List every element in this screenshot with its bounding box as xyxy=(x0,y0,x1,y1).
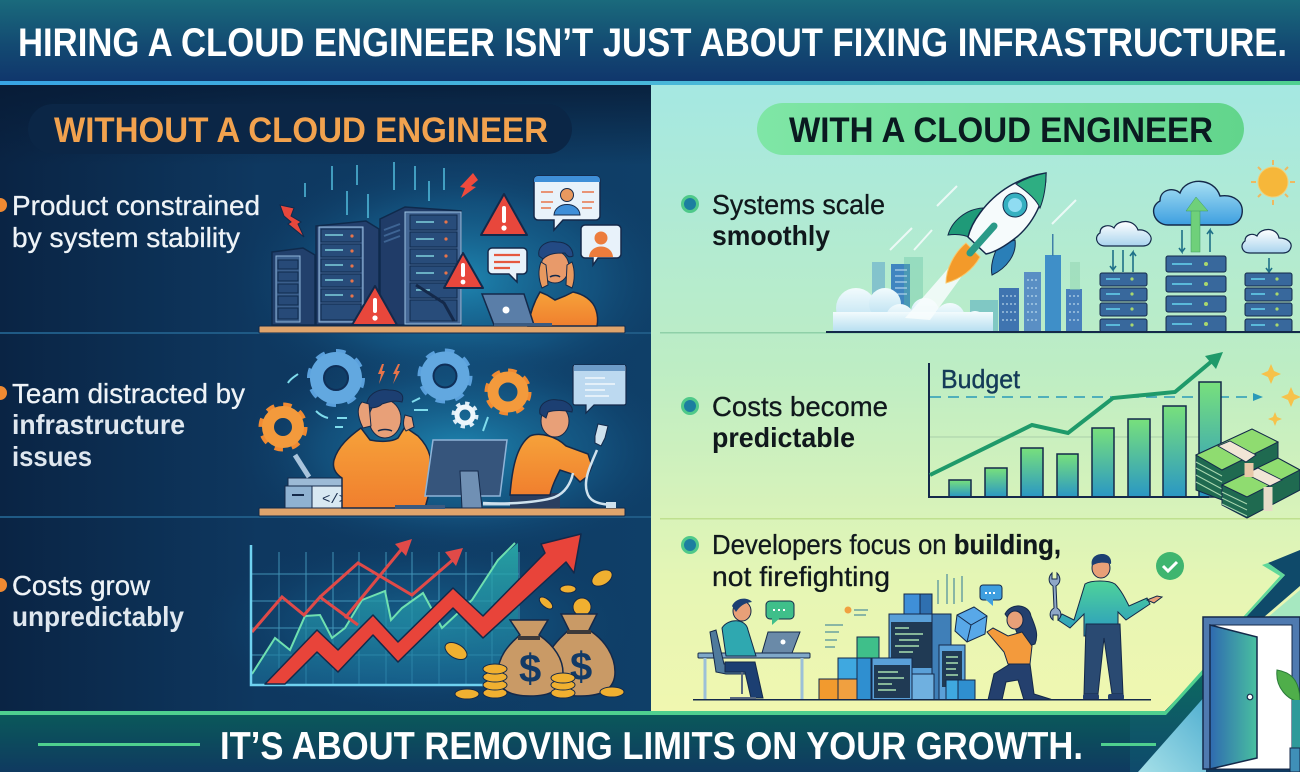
carried cube xyxy=(955,607,987,642)
trend line xyxy=(930,361,1212,475)
stressed developer xyxy=(333,390,430,508)
footer right rule xyxy=(1101,743,1156,746)
point: systems scale: smoothly xyxy=(712,220,831,251)
small transfer arrows xyxy=(1110,230,1272,272)
point: systems scale: Systems scale xyxy=(712,189,885,220)
icon: wrench xyxy=(1049,573,1061,620)
point: product constrained: by system stability xyxy=(12,222,240,253)
coins scattered xyxy=(442,566,615,663)
icon: sun xyxy=(1251,160,1295,205)
server small xyxy=(272,248,315,325)
grid xyxy=(251,552,519,685)
point: costs grow: unpredictably xyxy=(12,601,185,632)
cloud small right xyxy=(1242,229,1291,253)
money bag right: $ xyxy=(570,645,592,689)
footer text: IT’S ABOUT REMOVING LIMITS ON YOUR GROWTH. xyxy=(220,725,1083,768)
motion marks xyxy=(288,374,488,431)
teal area xyxy=(252,543,518,685)
point: costs predictable xyxy=(681,391,888,453)
chart: budget bars xyxy=(929,352,1300,518)
budget label: Budget xyxy=(941,364,1021,394)
thin red lines xyxy=(252,545,455,632)
city skyline xyxy=(872,234,1082,332)
point: developers focus: not firefighting xyxy=(712,561,890,592)
budget dashed line xyxy=(930,393,1263,401)
sparkles xyxy=(1261,364,1300,426)
point: systems scale xyxy=(681,189,885,251)
panel: with a cloud engineer xyxy=(651,85,1300,713)
money bag right xyxy=(543,614,615,696)
right heading pill xyxy=(757,103,1244,155)
axes xyxy=(251,545,519,685)
point: team distracted: Team distracted by xyxy=(12,378,245,409)
server large xyxy=(380,207,461,325)
point: developers focus xyxy=(681,529,1061,592)
illustration: distracted team xyxy=(259,352,626,516)
point: costs predictable: Costs become xyxy=(712,391,888,422)
point: team distracted: issues xyxy=(12,441,92,472)
point: costs grow xyxy=(0,570,185,632)
icon: user bubble xyxy=(581,225,621,265)
icon: gear orange left xyxy=(262,406,304,448)
point: team distracted: infrastructure xyxy=(12,409,185,440)
big up arrow xyxy=(1186,197,1208,252)
cloud big xyxy=(1154,181,1242,225)
footer left rule xyxy=(38,743,200,746)
money stacks xyxy=(1196,429,1300,518)
icon: gear blue right xyxy=(421,352,469,400)
money bag left: $ xyxy=(519,647,541,691)
falling data streaks xyxy=(305,162,444,218)
motion arrows xyxy=(890,186,1076,250)
icon: video call bubble xyxy=(534,176,600,230)
header banner xyxy=(0,0,1300,85)
stacked blocks and code windows xyxy=(819,594,975,700)
box with code: </> xyxy=(322,492,347,508)
stressed person xyxy=(528,242,598,326)
bubble blue xyxy=(980,585,1002,606)
left heading pill: WITHOUT A CLOUD ENGINEER xyxy=(54,111,548,150)
icon: lightning right xyxy=(460,173,478,198)
server stack middle xyxy=(1166,256,1226,332)
icon: check badge xyxy=(1156,552,1184,580)
kneeling woman xyxy=(987,606,1050,700)
standing engineer xyxy=(1058,554,1162,700)
box with code xyxy=(285,478,357,508)
illustration: failing servers xyxy=(259,162,625,333)
growth arrow xyxy=(1130,550,1300,772)
server lights xyxy=(1106,264,1265,325)
footer banner xyxy=(0,550,1300,772)
icon: gear orange right xyxy=(488,372,528,412)
icon: gear blue left xyxy=(311,353,361,403)
server stack left xyxy=(1100,273,1147,332)
panel: without a cloud engineer xyxy=(0,85,690,715)
big red arrow xyxy=(265,534,581,684)
icon: warning triangle middle xyxy=(444,253,483,288)
cloud small left xyxy=(1097,221,1151,246)
point: costs predictable: predictable xyxy=(712,422,855,453)
chart: unpredictable costs xyxy=(251,534,624,699)
clouds at launch xyxy=(833,288,993,333)
point: costs grow: Costs grow xyxy=(12,570,150,601)
icon: message bubble xyxy=(488,248,527,282)
icon: lightning left xyxy=(280,205,304,237)
illustration: team building xyxy=(693,552,1184,700)
coin stacks xyxy=(455,664,624,699)
plant leaf xyxy=(1277,670,1300,702)
point: product constrained: Product constrained xyxy=(12,190,260,221)
money bag left xyxy=(498,620,563,696)
exhaust trail xyxy=(905,264,962,320)
bubble green xyxy=(766,601,794,625)
wrench xyxy=(295,455,309,477)
server medium xyxy=(316,221,379,325)
right heading pill: WITH A CLOUD ENGINEER xyxy=(789,111,1213,150)
icon: warning triangle large xyxy=(481,194,527,235)
code bubble xyxy=(573,365,626,413)
laptop xyxy=(482,294,552,326)
point: product constrained xyxy=(0,190,260,253)
icon: gear white small xyxy=(454,404,476,426)
developer with plug xyxy=(483,400,616,508)
point: developers focus: Developers focus on building, xyxy=(712,529,1061,560)
point: team distracted xyxy=(0,378,245,472)
server stack right xyxy=(1245,273,1292,332)
icon: warning triangle bottom xyxy=(352,286,397,325)
monitor xyxy=(395,440,523,509)
icon: small bolts xyxy=(378,364,400,384)
illustration: rocket over city and cloud servers xyxy=(826,160,1300,333)
rocket xyxy=(946,173,1046,283)
bars xyxy=(949,382,1221,497)
icon: open door xyxy=(1203,617,1300,772)
floating list marks xyxy=(825,574,962,647)
seated developer at desk xyxy=(698,599,810,700)
